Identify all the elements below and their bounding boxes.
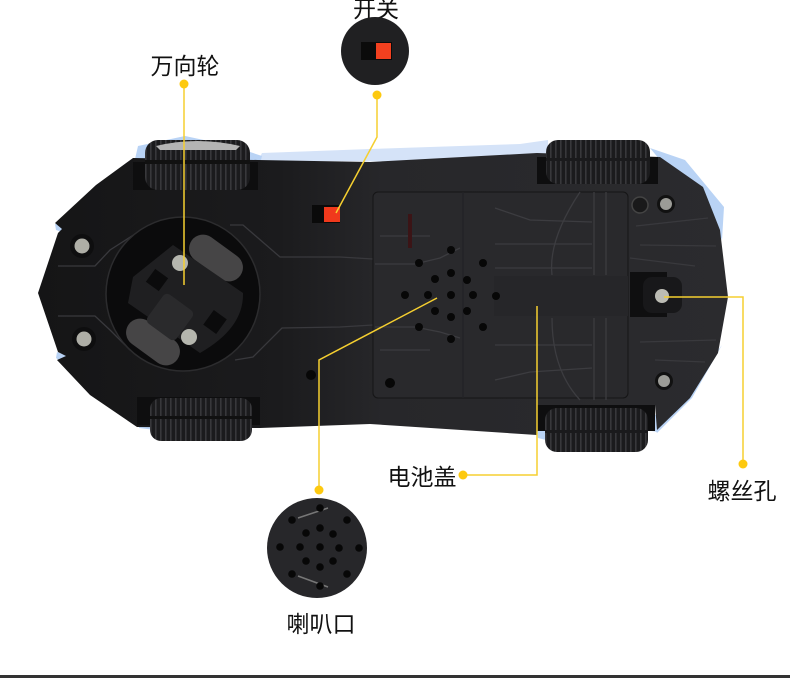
leader line: universal wheel	[180, 80, 188, 285]
caster axle block	[145, 292, 195, 342]
wheel: bottom right	[545, 408, 648, 452]
wheel: top right	[546, 140, 650, 184]
detail circle: speaker	[267, 498, 367, 598]
leader line: speaker	[314, 298, 437, 494]
universal wheel turntable	[106, 217, 260, 371]
leader line: battery cover	[458, 306, 537, 480]
caster rollers	[121, 229, 248, 371]
leader line: switch	[336, 90, 382, 213]
battery cover latch	[494, 276, 628, 316]
car underside	[38, 136, 728, 452]
leader line: screw hole	[664, 297, 748, 468]
caster mount plate	[128, 245, 243, 353]
bottom dark band	[0, 675, 790, 678]
body screws	[70, 195, 675, 390]
caster slots	[146, 269, 168, 291]
blue clear shell edges	[55, 136, 724, 441]
label: universal wheel: 万向轮	[150, 53, 220, 79]
wheel wells	[133, 157, 658, 431]
switch on car	[312, 205, 340, 223]
wheel: top left	[145, 140, 250, 190]
wheel: bottom left	[150, 398, 252, 441]
label: battery cover: 电池盖	[388, 464, 456, 490]
rear screw housing	[630, 272, 682, 317]
speaker holes	[306, 246, 500, 388]
moulded ridge lines	[58, 218, 716, 362]
caster screws	[172, 255, 188, 271]
body plate	[38, 153, 728, 435]
battery compartment outline	[373, 192, 628, 398]
detail circle: switch	[340, 17, 410, 87]
label: screw hole: 螺丝孔	[708, 478, 776, 504]
battery cover ridges	[375, 192, 606, 400]
label: speaker: 喇叭口	[286, 611, 356, 637]
red marker slot	[408, 214, 412, 248]
